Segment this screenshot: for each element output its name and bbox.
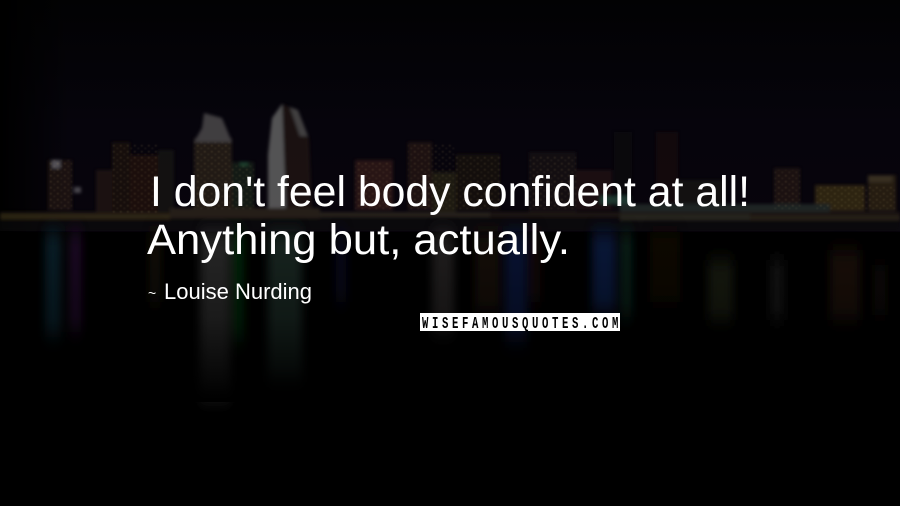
quote text xyxy=(147,168,750,264)
author attribution: Louise Nurding xyxy=(164,279,312,304)
background: lit windows xyxy=(48,142,895,213)
background: bottom fade xyxy=(0,232,900,402)
quote text: I don't feel body confident at all! xyxy=(150,168,750,216)
quote text: Anything but, actually. xyxy=(147,216,570,264)
watermark badge: WISEFAMOUSQUOTES.COM xyxy=(422,315,618,334)
background: city skyline xyxy=(0,104,900,231)
author attribution: ~ xyxy=(148,285,156,301)
background: water reflections xyxy=(45,232,885,397)
